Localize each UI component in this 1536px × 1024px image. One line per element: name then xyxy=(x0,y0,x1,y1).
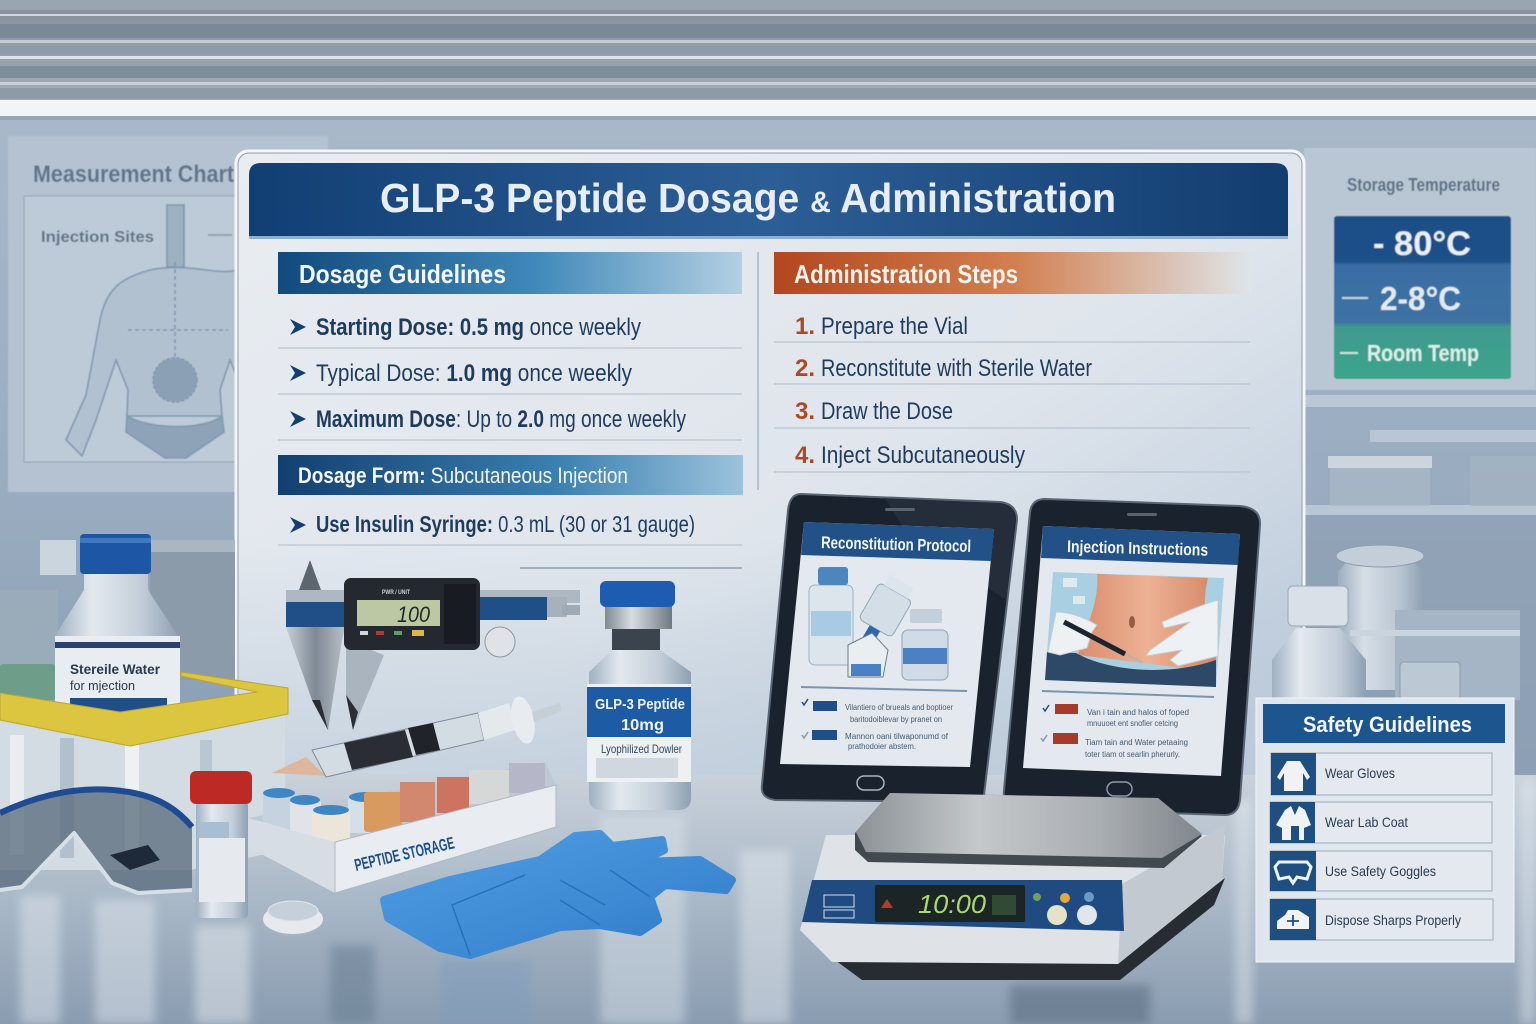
illustration: injection into abdomen xyxy=(1045,572,1224,687)
panel: measurement chart poster xyxy=(8,136,328,492)
heading: dosage guidelines xyxy=(278,252,742,294)
tablet: injection instructions xyxy=(1004,499,1260,815)
step 3: 3. xyxy=(795,398,815,425)
caption text: mnuuoet ent snofier cetcing xyxy=(1087,719,1178,728)
item: starting dose xyxy=(278,314,742,348)
item: dispose sharps properly xyxy=(1270,899,1493,940)
step 2: 2. xyxy=(795,355,815,382)
gauge: temperature bands xyxy=(1334,216,1511,379)
caliper display xyxy=(344,578,480,650)
heading: dosage form xyxy=(278,455,743,495)
item: insulin syringe xyxy=(278,511,742,545)
vial label: 10mg xyxy=(621,717,664,734)
caption text: Tiam tain and Water petaaing xyxy=(1085,738,1188,747)
item: starting dose: Starting Dose: 0.5 mg once weekly xyxy=(316,314,641,341)
panel: safety guidelines xyxy=(1256,698,1514,962)
tablet heading: Injection Instructions xyxy=(1067,537,1208,560)
item: wear gloves xyxy=(1271,753,1492,795)
tablet heading xyxy=(801,522,994,561)
panel: main board xyxy=(236,151,1304,791)
tablet heading xyxy=(1041,526,1240,565)
illustration: vials being mixed xyxy=(809,567,948,680)
vial label xyxy=(595,696,685,778)
digital caliper xyxy=(286,560,580,730)
heading: safety guidelines: Safety Guidelines xyxy=(1303,712,1472,737)
gauge: temperature bands: Room Temp xyxy=(1367,340,1479,366)
bottle label: for mjection xyxy=(70,678,135,693)
bottle label: Stereile Water xyxy=(70,661,161,677)
scale display: 10:00 xyxy=(918,889,987,919)
item: insulin syringe: Use Insulin Syringe: 0.3 mL (30 or 31 gauge) xyxy=(316,511,695,537)
item: wear lab coat xyxy=(1270,802,1492,843)
scale display xyxy=(875,885,1025,922)
digital scale xyxy=(800,793,1225,980)
step 1 xyxy=(774,313,1250,342)
caption text: Van i tain and halos of foped xyxy=(1087,708,1189,717)
loose cap xyxy=(262,901,324,935)
home button xyxy=(857,776,884,790)
heading: administration steps: Administration Steps xyxy=(794,259,1018,289)
step 3: Draw the Dose xyxy=(821,398,953,425)
title banner: GLP-3 Peptide Dosage & Administration xyxy=(380,175,1116,221)
peptide storage tray xyxy=(248,762,556,893)
title banner xyxy=(249,163,1288,239)
step 1: 1. xyxy=(795,313,815,340)
bottle: sterile water xyxy=(55,534,180,730)
step 3 xyxy=(774,398,1250,428)
item: use safety goggles xyxy=(1270,851,1492,891)
heading: administration steps xyxy=(774,252,1252,294)
bottle: clear vial right xyxy=(1272,586,1366,700)
vial: GLP-3 peptide xyxy=(587,581,691,810)
item: typical dose xyxy=(278,360,742,394)
item: wear gloves: Wear Gloves xyxy=(1325,765,1395,781)
vial label: Lyophilized Dowler xyxy=(601,742,682,756)
step 4: Inject Subcutaneously xyxy=(821,442,1025,469)
item: use safety goggles: Use Safety Goggles xyxy=(1325,863,1436,879)
panel: storage temperature xyxy=(1304,148,1536,390)
item: maximum dose: Maximum Dose: Up to 2.0 mg once weekly xyxy=(316,406,686,433)
caption text: baritodoiblevar by pranet on xyxy=(850,715,942,724)
tablet heading: Reconstitution Protocol xyxy=(821,533,971,556)
step 4: 4. xyxy=(795,442,815,469)
heading: safety guidelines xyxy=(1263,704,1505,743)
section: dosage guidelines xyxy=(278,252,743,568)
heading: storage temperature: Storage Temperature xyxy=(1347,175,1500,195)
section: administration steps xyxy=(774,252,1252,472)
bottle label xyxy=(70,661,167,712)
counter surface xyxy=(0,775,1536,1024)
caption text: Mannon oani tilwaponumd of xyxy=(845,732,949,741)
item: typical dose: Typical Dose: 1.0 mg once weekly xyxy=(316,360,632,387)
heading: dosage form: Dosage Form: Subcutaneous Injection xyxy=(298,463,628,488)
step 1: Prepare the Vial xyxy=(821,313,968,340)
caliper display: PWR / UNIT xyxy=(382,590,410,596)
syringe xyxy=(272,694,562,777)
gauge: temperature bands: 2-8°C xyxy=(1380,280,1461,317)
box label: PEPTIDE STORAGE xyxy=(353,833,456,875)
item: dispose sharps properly: Dispose Sharps Properly xyxy=(1325,912,1461,928)
caption text xyxy=(1041,704,1189,759)
caption text xyxy=(802,699,953,751)
home button xyxy=(1107,782,1132,796)
label: injection sites: Injection Sites xyxy=(41,229,154,246)
step 2: Reconstitute with Sterile Water xyxy=(821,355,1092,382)
item: wear lab coat: Wear Lab Coat xyxy=(1325,814,1408,830)
gauge: temperature bands: - 80°C xyxy=(1373,225,1471,263)
heading: measurement chart: Measurement Chart xyxy=(33,161,234,188)
background bottles right xyxy=(1336,545,1520,700)
blue nitrile gloves xyxy=(384,834,732,955)
tablet: reconstitution protocol xyxy=(762,494,1017,802)
step 2 xyxy=(774,355,1250,384)
storage box with yellow rim xyxy=(0,672,288,870)
caption text: prathodoier abstem. xyxy=(848,742,916,751)
item: maximum dose xyxy=(278,406,742,440)
illustration: torso outline xyxy=(66,205,238,458)
background jar left xyxy=(0,540,235,700)
sample tube with red cap xyxy=(190,771,252,918)
vial label: GLP-3 Peptide xyxy=(595,696,685,713)
caption text: toter tiam ot searlin pherurly. xyxy=(1085,750,1180,759)
caption text: Vilantiero of brueals and boptioer xyxy=(845,703,953,712)
safety goggles xyxy=(0,789,192,893)
caliper display: 100 xyxy=(397,602,431,627)
step 4 xyxy=(774,442,1250,472)
heading: dosage guidelines: Dosage Guidelines xyxy=(299,259,506,289)
